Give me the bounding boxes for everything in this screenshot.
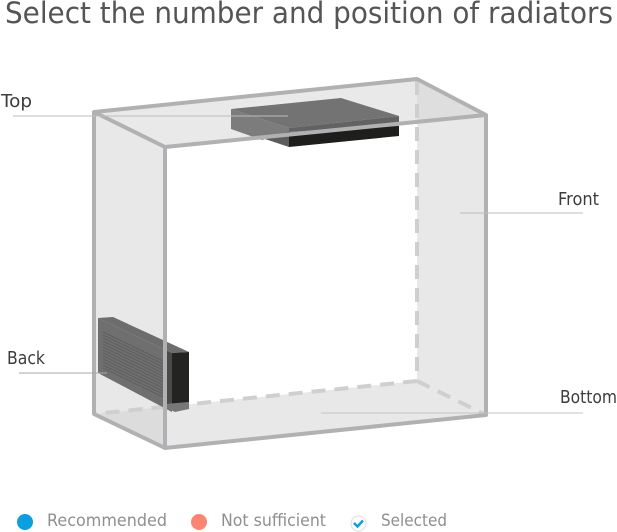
legend: selected: Selected [381, 511, 447, 531]
label: Back [7, 348, 107, 373]
radiator: top [231, 98, 399, 147]
label: Back: Back [7, 348, 45, 369]
legend [17, 511, 447, 531]
radiator grille [103, 332, 163, 397]
case box hidden dashed edges [94, 81, 486, 415]
case box faces [94, 79, 486, 448]
radiator: back [98, 317, 189, 412]
legend: not sufficient: Not sufficient [221, 511, 326, 531]
case box solid edges [94, 79, 486, 448]
label: Front: Front [558, 189, 599, 210]
label: Front [460, 189, 599, 213]
legend: recommended: Recommended [47, 511, 167, 531]
label: Top: Top [0, 91, 32, 112]
legend: selected [351, 511, 447, 531]
